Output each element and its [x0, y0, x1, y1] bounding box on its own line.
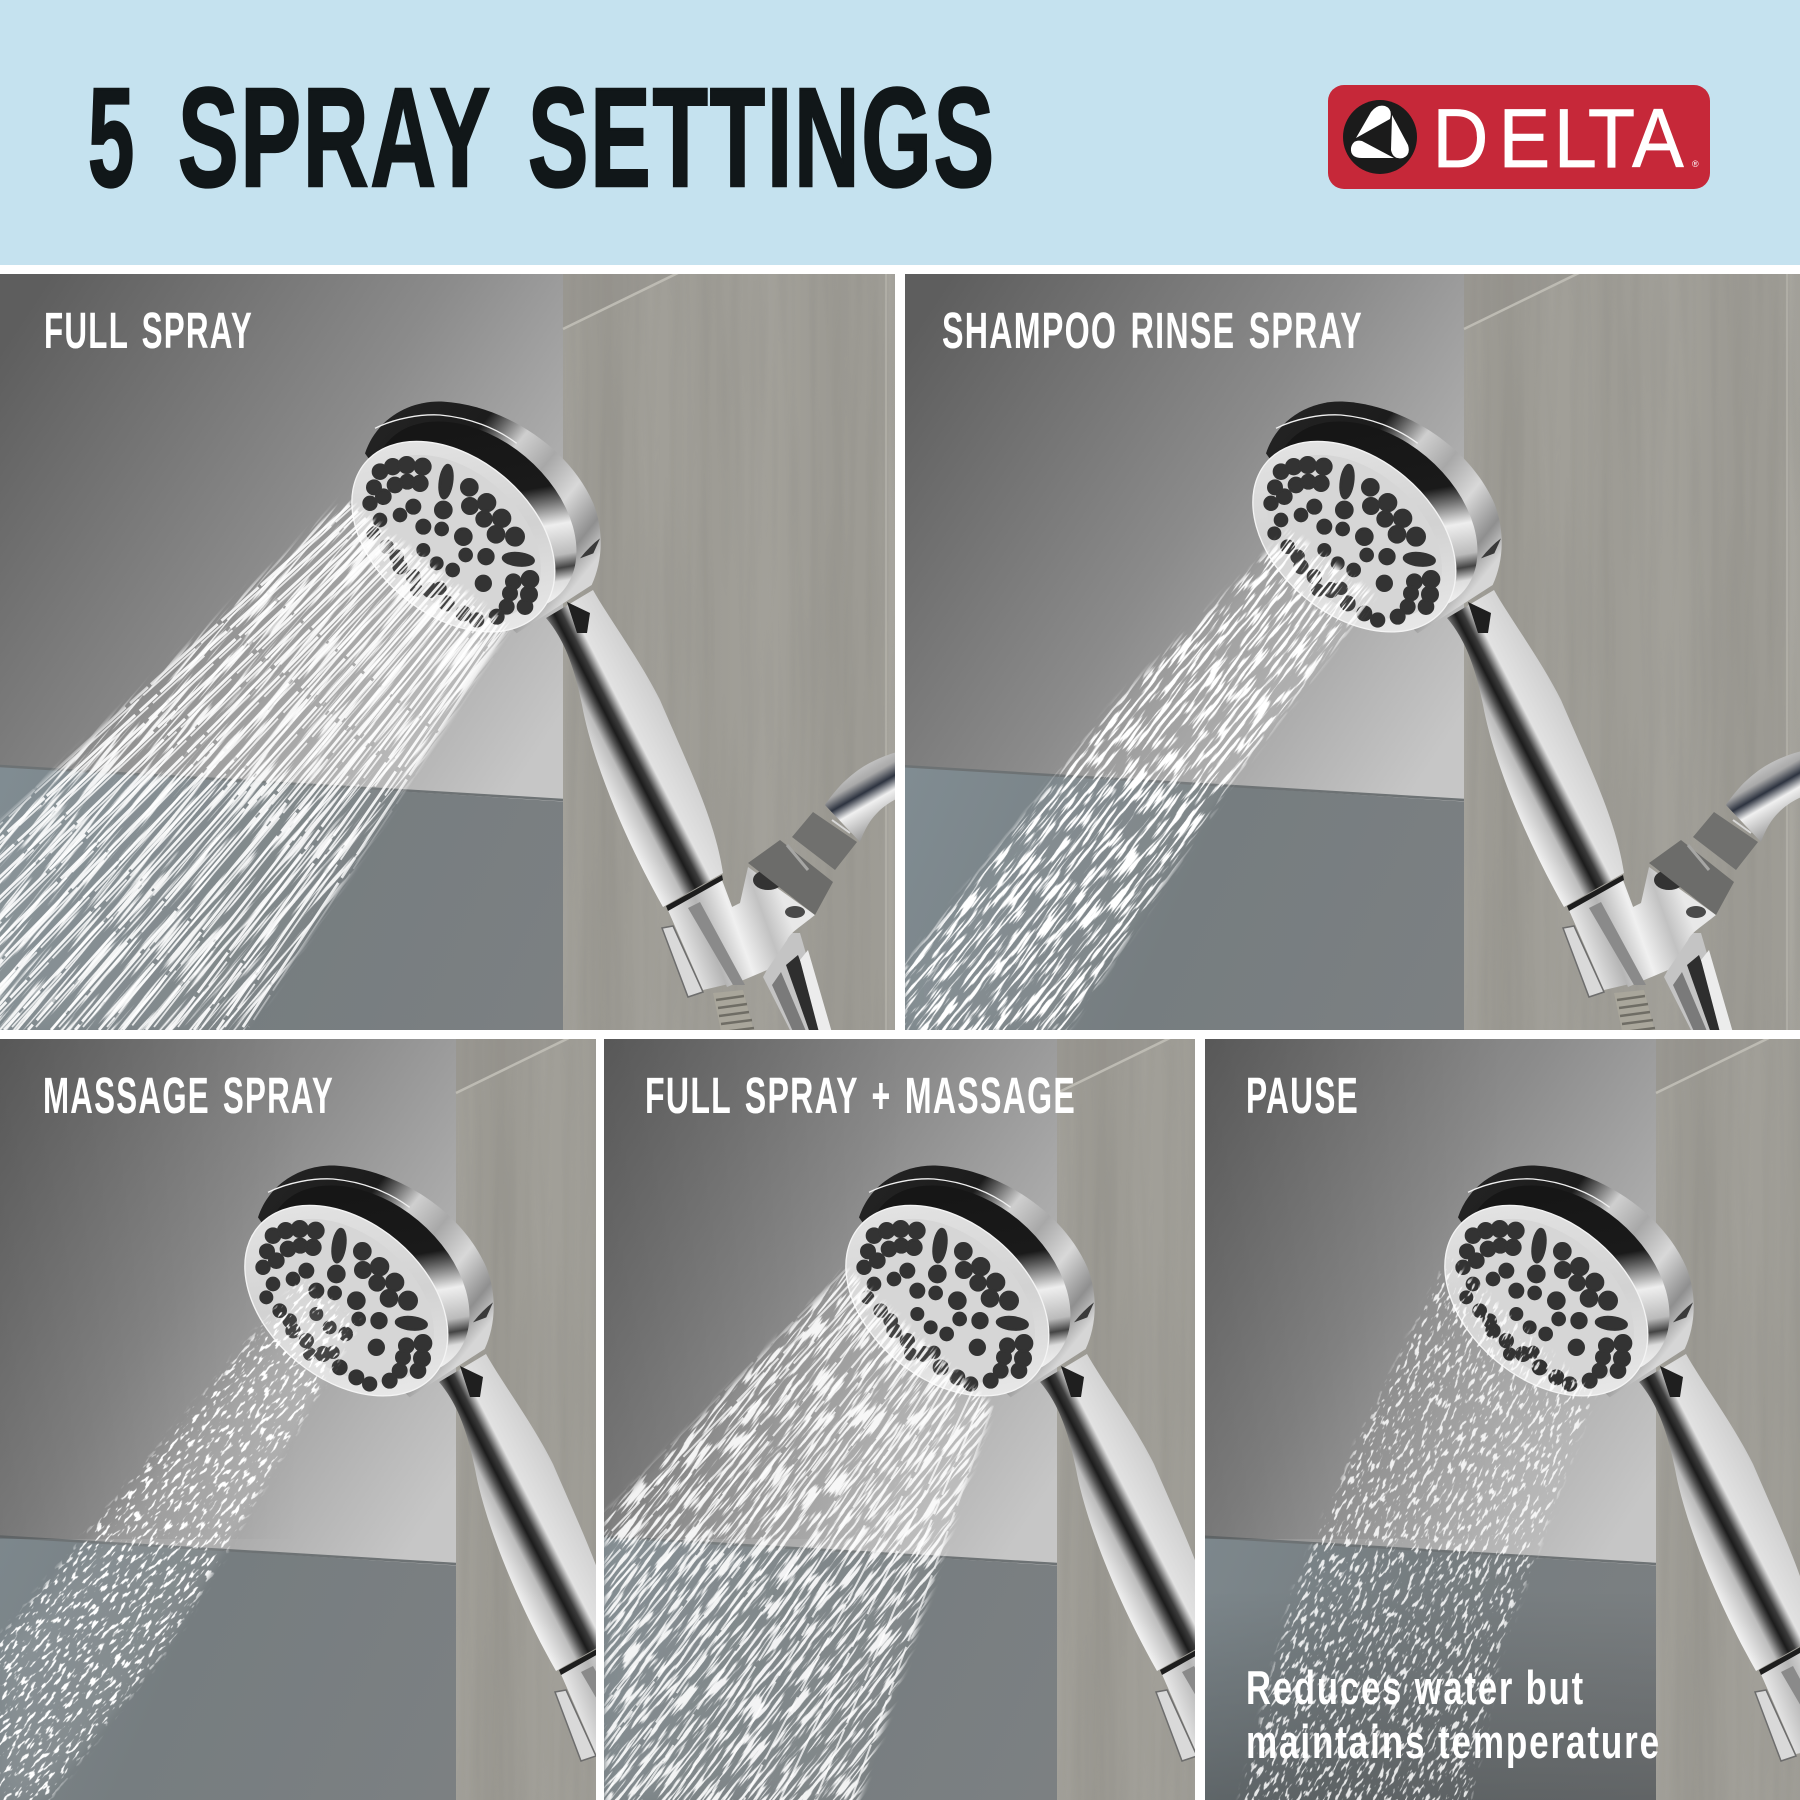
water spray: massage	[0, 1270, 370, 1800]
title: 5	[88, 58, 136, 216]
water spray: pause	[1230, 1250, 1605, 1800]
shower wall background	[901, 270, 1800, 1036]
water spray: full plus massage	[604, 1268, 994, 1800]
shower wall background	[494, 1034, 1402, 1800]
shower wall background	[1093, 1034, 1800, 1800]
label: MASSAGE SPRAY	[43, 1067, 334, 1124]
hand shower	[315, 383, 905, 1036]
panel: full spray plus massage	[604, 1039, 1195, 1800]
panel: shampoo rinse spray	[905, 274, 1800, 1030]
shower wall background	[0, 1034, 801, 1800]
panel: massage spray	[0, 1039, 596, 1800]
Delta logo: DELTA	[1432, 92, 1684, 186]
Delta logo	[1328, 85, 1710, 189]
hand shower	[809, 1147, 1399, 1800]
title: SETTINGS	[528, 58, 996, 216]
hand shower	[208, 1147, 798, 1800]
title	[88, 58, 996, 216]
shower wall background	[0, 270, 908, 1036]
Delta logo: ®	[1692, 159, 1699, 169]
left wall shading	[1205, 1039, 1505, 1539]
note: Reduces water but	[1246, 1661, 1585, 1714]
left wall shading	[0, 1039, 300, 1539]
panel: pause	[1205, 1039, 1800, 1800]
header band	[0, 0, 1800, 265]
hand shower	[1216, 383, 1800, 1036]
bottom shade	[1205, 1590, 1656, 1800]
left wall shading	[604, 1039, 904, 1539]
panel: full spray	[0, 274, 895, 1030]
note: maintains temperature	[1246, 1715, 1661, 1768]
label: SHAMPOO RINSE SPRAY	[942, 302, 1363, 359]
label: FULL SPRAY	[44, 302, 253, 359]
water spray: shampoo rinse	[905, 520, 1385, 1030]
title: SPRAY	[178, 58, 492, 216]
label: PAUSE	[1246, 1067, 1359, 1124]
water spray: full	[0, 480, 520, 1030]
hand shower	[1408, 1147, 1800, 1800]
note	[1246, 1661, 1661, 1768]
